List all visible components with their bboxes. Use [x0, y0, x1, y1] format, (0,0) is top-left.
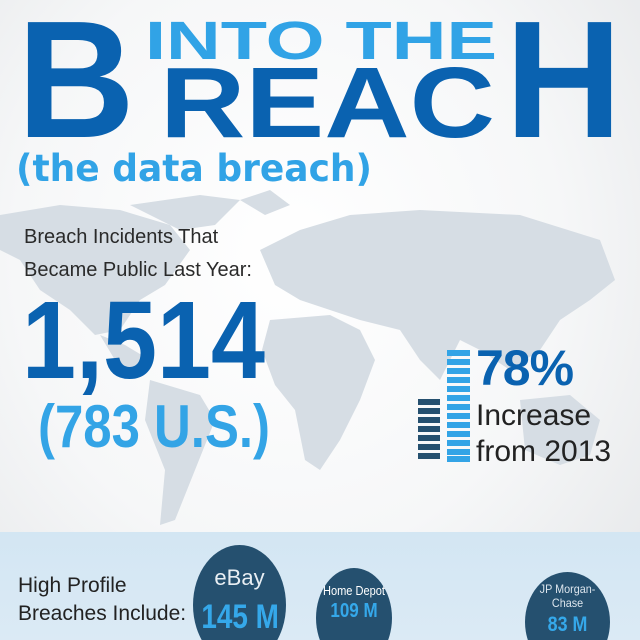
band label: Breaches Include: [18, 602, 186, 625]
big numbers [22, 290, 270, 460]
circle: eBay: eBay [214, 565, 265, 590]
intro text: Became Public Last Year: [24, 259, 252, 281]
circle: Home Depot: Home Depot [323, 583, 385, 598]
intro text: Breach Incidents That [24, 226, 218, 248]
circle: eBay [193, 545, 286, 640]
subtitle: (the data breach) [16, 147, 372, 190]
circle: eBay: 145 M [201, 598, 279, 636]
increase stat [476, 340, 611, 468]
increase label [476, 399, 611, 468]
intro text [24, 226, 252, 281]
band label: High Profile [18, 574, 127, 597]
increase label: Increase [476, 399, 591, 432]
circle: Home Depot: 109 M [330, 600, 378, 622]
bar icon [418, 350, 470, 462]
increase label: from 2013 [476, 435, 611, 468]
circle: JP Morgan-Chase: JP Morgan- [540, 582, 595, 596]
title INTO THE: INTO THE [145, 11, 497, 71]
title [16, 0, 622, 190]
band label [18, 574, 186, 625]
circle: Home Depot [316, 568, 392, 640]
circle: JP Morgan-Chase: 83 M [548, 613, 587, 636]
bottom band [0, 532, 640, 640]
circle: JP Morgan-Chase [525, 572, 610, 640]
circle: JP Morgan-Chase: Chase [552, 596, 583, 610]
78%: 78% [476, 340, 573, 396]
title REAC: REAC [160, 47, 495, 159]
